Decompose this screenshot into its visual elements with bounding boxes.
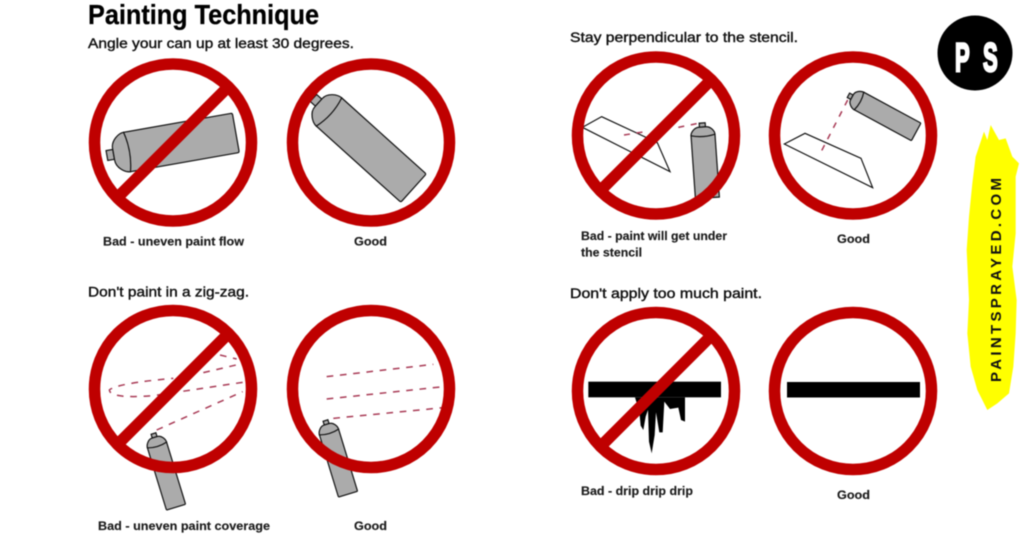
icon: ring, perpendicular good [774, 57, 932, 214]
icon: can beside stencil (bad) [690, 122, 719, 199]
logo badge: S [983, 35, 998, 80]
caption: perpendicular good: Good [837, 232, 870, 246]
icon: parallel spray lines (good) [327, 364, 443, 418]
icon: prohibition sign, paint bad [578, 312, 734, 470]
logo badge [938, 16, 1012, 90]
caption: perpendicular bad: Bad - paint will get under [581, 229, 727, 243]
yellow brush stroke with site name [967, 125, 1019, 410]
caption: angle good: Good [354, 234, 387, 248]
caption: perpendicular bad: the stencil [581, 246, 642, 260]
icon: prohibition sign, zig-zag bad [94, 310, 252, 468]
icon: ring, zig-zag good [292, 310, 450, 468]
icon: stencil with straight spray (good) [784, 100, 873, 188]
heading: too much paint: Don't apply too much paint. [570, 285, 762, 301]
heading: perpendicular: Stay perpendicular to the stencil. [570, 29, 798, 45]
logo badge: P [955, 35, 970, 80]
icon: clean paint bar (good) [787, 382, 920, 398]
panel: zig-zag [88, 284, 450, 533]
caption: zig-zag bad: Bad - uneven paint coverage [98, 519, 270, 533]
caption: zig-zag good: Good [354, 519, 387, 533]
icon: can perpendicular (good) [844, 86, 921, 141]
caption: angle bad: Bad - uneven paint flow [103, 234, 245, 248]
icon: can, zig-zag bad [144, 431, 186, 510]
icon: can, zig-zag good [316, 418, 358, 497]
panel: too much paint [570, 285, 932, 502]
icon: zig-zag spray path (bad) [109, 355, 243, 430]
heading: zig-zag: Don't paint in a zig-zag. [88, 284, 249, 300]
icon: prohibition sign, perpendicular bad [578, 57, 734, 214]
icon: ring, angle good [292, 64, 450, 221]
caption: perpendicular bad [581, 229, 727, 260]
yellow brush stroke with site name: PAINTSPRAYED.COM [988, 178, 1005, 382]
caption: paint bad: Bad - drip drip drip [581, 484, 693, 498]
caption: paint good: Good [837, 488, 870, 502]
panel: stay perpendicular [570, 29, 932, 260]
icon: dripping paint bar (bad) [588, 382, 721, 453]
heading: angle: Angle your can up at least 30 degrees. [88, 35, 354, 51]
icon: ring, paint good [774, 312, 932, 470]
icon: prohibition sign, angle bad [94, 64, 252, 221]
icon: can held flat (bad) [103, 113, 239, 175]
icon: stencil with angled spray (bad) [582, 117, 698, 172]
panel: angle your can [88, 35, 450, 248]
icon: can angled up (good) [301, 84, 426, 202]
